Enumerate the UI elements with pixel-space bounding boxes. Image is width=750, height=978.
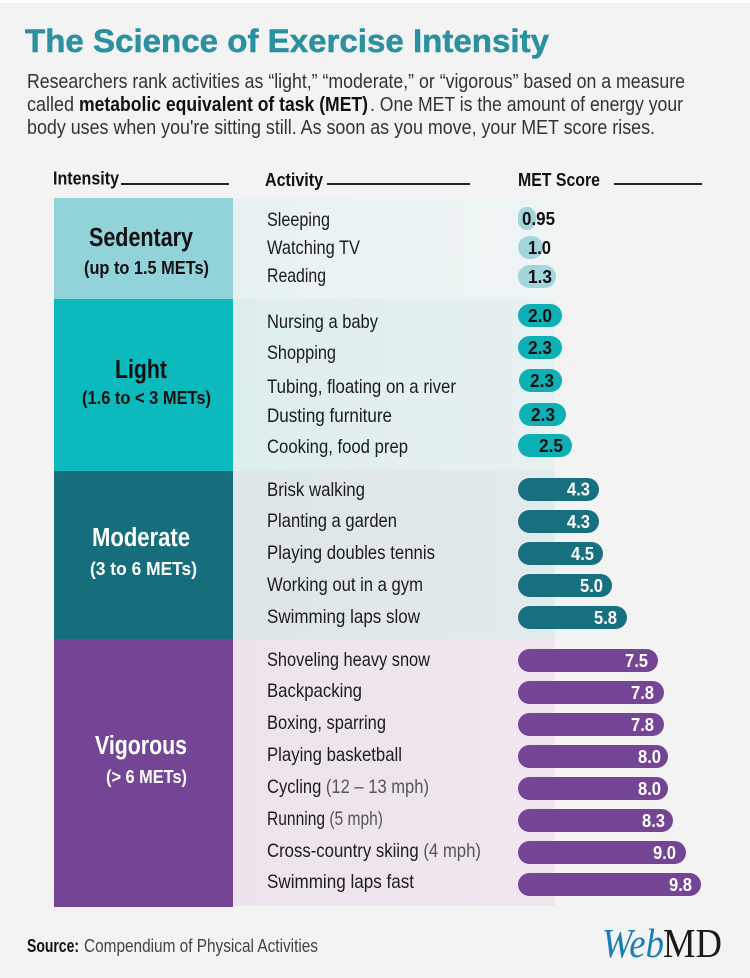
panel: Moderate xyxy=(54,471,627,639)
column header: MET Score: MET Score xyxy=(518,170,600,190)
intensity block: Light: (1.6 to < 3 METs) xyxy=(82,387,211,408)
column header: Activity: Activity xyxy=(265,170,323,190)
activity: Playing doubles tennis: 4.5 xyxy=(571,543,594,564)
panel: Vigorous xyxy=(54,639,701,907)
intensity block: Sedentary: (up to 1.5 METs) xyxy=(84,257,209,278)
activity: Dusting furniture: 2.3 xyxy=(531,404,555,425)
intro text: metabolic equivalent of task (MET) xyxy=(79,93,368,116)
activity: Shoveling heavy snow: Shoveling heavy snow xyxy=(267,649,431,671)
activity: Cycling (12 – 13 mph): 8.0 xyxy=(638,778,661,799)
activity: Backpacking: 7.8 xyxy=(631,682,654,703)
activity: Working out in a gym: 5.0 xyxy=(580,575,603,596)
activity: Dusting furniture: Dusting furniture xyxy=(267,405,392,427)
intro text: . One MET is the amount of energy your xyxy=(370,93,683,116)
activity: Brisk walking: 4.3 xyxy=(567,478,590,500)
activity: Swimming laps slow: Swimming laps slow xyxy=(267,606,421,628)
activity: Running (5 mph): 8.3 xyxy=(642,810,665,831)
panel: Sedentary xyxy=(54,198,556,299)
intensity block: Vigorous xyxy=(54,639,233,907)
intensity block: Sedentary xyxy=(54,198,233,299)
intensity block: Vigorous: (> 6 METs) xyxy=(106,766,187,787)
activity: Cycling (12 – 13 mph) xyxy=(267,776,668,800)
activity: Running (5 mph): Running (5 mph) xyxy=(267,808,383,830)
intensity block: Sedentary: Sedentary xyxy=(89,224,194,252)
intro text xyxy=(27,70,685,139)
intensity block: Moderate xyxy=(54,471,233,639)
activity: Sleeping xyxy=(267,207,555,231)
activity: Shopping: Shopping xyxy=(267,342,336,364)
activity: Swimming laps slow xyxy=(267,606,627,629)
activity: Nursing a baby: 2.0 xyxy=(528,305,552,326)
activity: Boxing, sparring: Boxing, sparring xyxy=(267,712,386,734)
activity: Cooking, food prep xyxy=(267,434,572,458)
intensity block: Light: Light xyxy=(115,356,167,384)
activity: Swimming laps fast: 9.8 xyxy=(669,874,692,895)
activity: Brisk walking xyxy=(267,478,599,501)
activity: Watching TV: Watching TV xyxy=(267,237,360,259)
title: The Science of Exercise Intensity xyxy=(25,23,549,59)
activity: Swimming laps slow: 5.8 xyxy=(594,607,617,628)
activity: Playing basketball: 8.0 xyxy=(638,746,661,767)
source note: Source: xyxy=(27,936,79,956)
activity: Boxing, sparring xyxy=(267,712,664,736)
WebMD logo: MD xyxy=(663,920,722,966)
activity: Nursing a baby: Nursing a baby xyxy=(267,311,378,333)
activity: Shopping: 2.3 xyxy=(528,337,552,358)
activity: Cross-country skiing (4 mph) xyxy=(267,840,686,864)
activity: Tubing, floating on a river xyxy=(267,369,562,398)
activity: Shopping xyxy=(267,336,562,364)
WebMD logo xyxy=(602,920,722,966)
intensity block: Moderate: Moderate xyxy=(92,524,190,552)
activity: Sleeping: 0.95 xyxy=(522,208,555,229)
activity: Backpacking: Backpacking xyxy=(267,680,362,702)
intro text: called xyxy=(27,93,74,116)
activity: Brisk walking: Brisk walking xyxy=(267,479,365,501)
activity: Cycling (12 – 13 mph): Cycling (12 – 13 mph) xyxy=(267,776,429,798)
activity: Cross-country skiing (4 mph): 9.0 xyxy=(653,842,676,863)
source note: Compendium of Physical Activities xyxy=(84,935,318,956)
activity: Swimming laps fast xyxy=(267,871,701,896)
activity: Reading xyxy=(267,265,556,288)
intro text: body uses when you're sitting still. As soon as you move, your MET score rises. xyxy=(27,116,655,139)
activity: Backpacking xyxy=(267,680,664,704)
activity: Watching TV: 1.0 xyxy=(528,237,551,258)
panel: Light xyxy=(54,299,572,471)
activity: Tubing, floating on a river: 2.3 xyxy=(530,370,554,391)
activity: Playing doubles tennis: Playing doubles tennis xyxy=(267,542,435,564)
activity: Cross-country skiing (4 mph): Cross-country skiing (4 mph) xyxy=(267,840,481,862)
intensity block: Moderate: (3 to 6 METs) xyxy=(90,558,197,579)
activity: Playing basketball: Playing basketball xyxy=(267,744,402,766)
activity: Watching TV xyxy=(267,236,551,259)
activity: Boxing, sparring: 7.8 xyxy=(631,714,654,735)
activity: Cooking, food prep: 2.5 xyxy=(539,435,563,456)
activity: Playing doubles tennis xyxy=(267,542,603,565)
source note xyxy=(27,935,318,956)
activity: Playing basketball xyxy=(267,744,668,768)
activity: Working out in a gym xyxy=(267,574,612,597)
activity: Swimming laps fast: Swimming laps fast xyxy=(267,871,415,893)
activity: Reading: 1.3 xyxy=(528,266,552,287)
activity: Nursing a baby xyxy=(267,304,562,333)
activity: Planting a garden: Planting a garden xyxy=(267,510,397,532)
intensity block: Vigorous: Vigorous xyxy=(95,732,187,760)
activity: Cooking, food prep: Cooking, food prep xyxy=(267,436,408,458)
activity: Shoveling heavy snow: 7.5 xyxy=(625,650,648,671)
intensity block: Light xyxy=(54,299,233,471)
activity: Planting a garden: 4.3 xyxy=(567,511,590,532)
activity: Shoveling heavy snow xyxy=(267,649,658,672)
activity: Reading: Reading xyxy=(267,265,326,287)
activity: Planting a garden xyxy=(267,510,599,533)
activity: Running (5 mph) xyxy=(267,808,673,832)
activity: Tubing, floating on a river: Tubing, floating on a river xyxy=(267,376,456,398)
activity: Sleeping: Sleeping xyxy=(267,209,330,231)
WebMD logo: Web xyxy=(602,920,664,966)
column header: Intensity: Intensity xyxy=(53,168,119,188)
activity: Working out in a gym: Working out in a gym xyxy=(267,574,423,596)
activity: Dusting furniture xyxy=(267,403,566,427)
